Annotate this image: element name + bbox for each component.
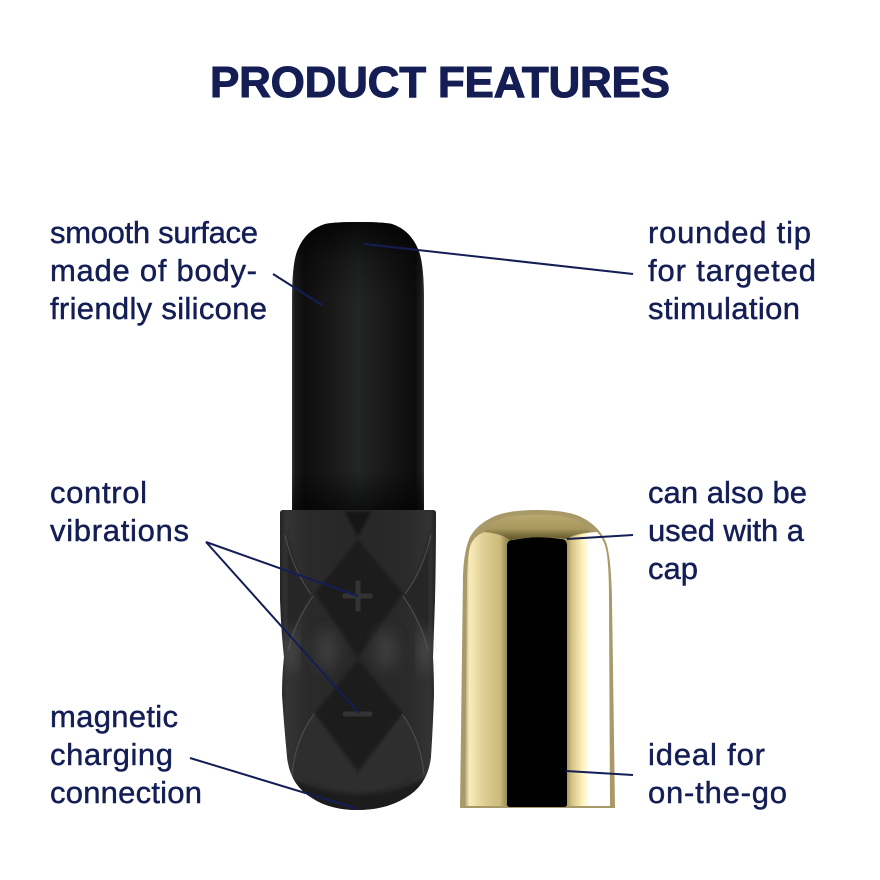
vibrator upper shaft xyxy=(292,222,424,512)
label: magnetic charging xyxy=(50,699,202,810)
product: gold cap xyxy=(460,510,615,808)
button: plus xyxy=(342,580,373,612)
product: vibrator xyxy=(278,222,438,812)
label: magnetic charging: connection xyxy=(50,775,202,810)
title: PRODUCT FEATURES xyxy=(210,58,670,107)
label: smooth surface xyxy=(50,215,267,326)
label: rounded tip xyxy=(648,215,816,326)
label: rounded tip: for targeted xyxy=(648,253,816,288)
label: control vibrations: control xyxy=(50,475,147,510)
vibrator textured base xyxy=(278,508,438,812)
label: smooth surface: friendly silicone xyxy=(50,291,267,326)
cap left panel xyxy=(465,532,510,806)
cap right panel xyxy=(567,532,610,806)
label: smooth surface: smooth surface xyxy=(50,215,258,250)
label: cap: used with a xyxy=(648,513,805,548)
label: control vibrations xyxy=(50,475,189,548)
label: rounded tip: rounded tip xyxy=(648,215,811,250)
label: magnetic charging: magnetic xyxy=(50,699,178,734)
cap top reflection xyxy=(485,514,590,540)
label: on the go: on-the-go xyxy=(648,775,787,810)
label: cap xyxy=(648,475,807,586)
label: rounded tip: stimulation xyxy=(648,291,800,326)
label: cap: cap xyxy=(648,551,698,586)
leader lines xyxy=(190,244,633,809)
button: minus xyxy=(342,711,373,717)
cap black reflection xyxy=(507,537,567,807)
label: smooth surface: made of body- xyxy=(50,253,257,288)
label: cap: can also be xyxy=(648,475,807,510)
diamond facets xyxy=(285,512,431,812)
label: on the go: ideal for xyxy=(648,737,765,772)
label: magnetic charging: charging xyxy=(50,737,173,772)
label: on the go xyxy=(648,737,787,810)
label: control vibrations: vibrations xyxy=(50,513,189,548)
